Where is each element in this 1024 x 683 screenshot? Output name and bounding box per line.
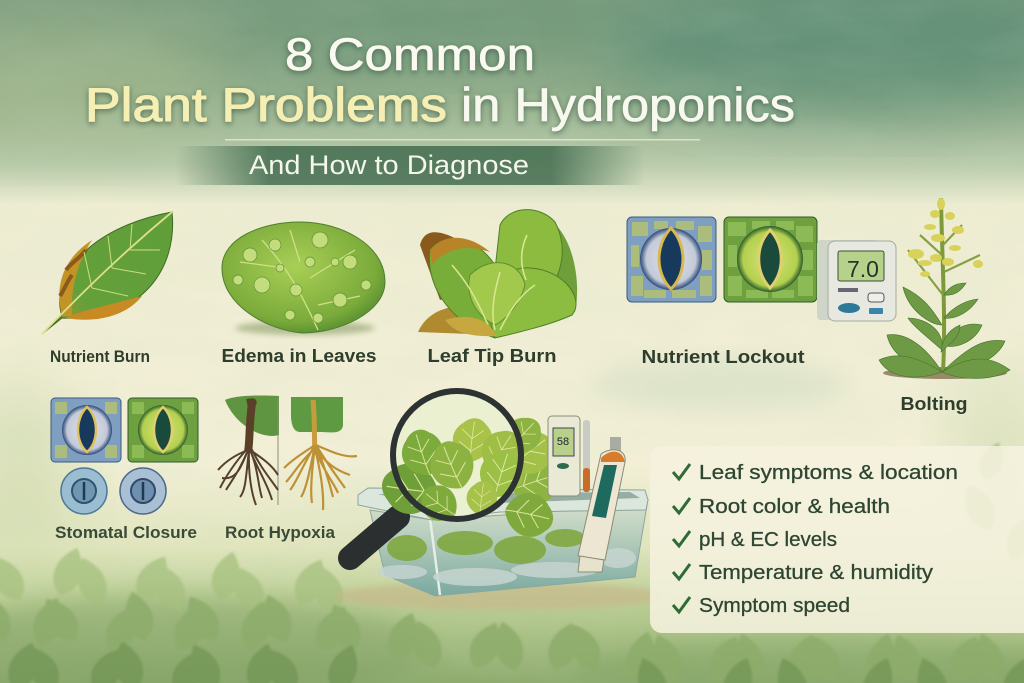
checklist item: root color: Root color & health	[699, 495, 890, 518]
closed stoma circles	[61, 468, 166, 514]
label: nutrient lockout: Nutrient Lockout	[642, 346, 804, 367]
checklist item: temperature: Temperature & humidity	[699, 561, 934, 584]
icon: bolting plant	[879, 198, 1010, 379]
checklist item: pH and EC: pH & EC levels	[699, 528, 837, 551]
tile: blue stoma	[51, 398, 121, 462]
icon: leaf tip burn lettuce	[418, 210, 577, 338]
tile: green stoma	[128, 398, 198, 462]
subtitle band	[175, 139, 700, 185]
panel: diagnostic checklist	[650, 446, 1024, 633]
title: 8 Common	[285, 29, 535, 80]
meter	[817, 240, 896, 321]
meter: 7.0	[847, 256, 879, 282]
label: edema in leaves: Edema in Leaves	[222, 346, 376, 366]
tile: blue stoma	[627, 217, 716, 302]
label: nutrient burn: Nutrient Burn	[50, 347, 150, 366]
title	[85, 29, 795, 131]
tester and thermometer	[548, 416, 590, 496]
title: Plant Problems	[85, 78, 447, 131]
label: stomatal closure: Stomatal Closure	[55, 523, 197, 542]
label: leaf tip burn: Leaf Tip Burn	[428, 346, 556, 366]
label: root hypoxia: Root Hypoxia	[225, 523, 336, 542]
tile: green stoma	[724, 217, 817, 302]
healthy golden roots	[284, 397, 357, 510]
subtitle band: And How to Diagnose	[249, 150, 529, 180]
icon: edema leaf	[222, 222, 385, 335]
checklist item: symptom speed: Symptom speed	[699, 594, 850, 617]
checklist item: leaf symptoms: Leaf symptoms & location	[699, 461, 958, 484]
label: bolting: Bolting	[900, 393, 968, 414]
icon: nutrient lockout stomata and meter	[627, 217, 896, 321]
magnifier	[350, 391, 530, 558]
hydroponic tank with magnifier	[335, 391, 665, 610]
unhealthy brown roots	[218, 395, 279, 505]
bottom foliage	[0, 439, 1024, 683]
icon: stomatal closure	[51, 398, 198, 514]
pen meter	[578, 437, 625, 572]
tank body	[358, 488, 648, 596]
lettuce behind tools	[496, 409, 566, 541]
tester and thermometer: 58	[557, 436, 569, 448]
icon: root hypoxia	[218, 395, 357, 510]
icon: nutrient burn leaf	[42, 212, 173, 334]
title: in Hydroponics	[461, 78, 795, 131]
